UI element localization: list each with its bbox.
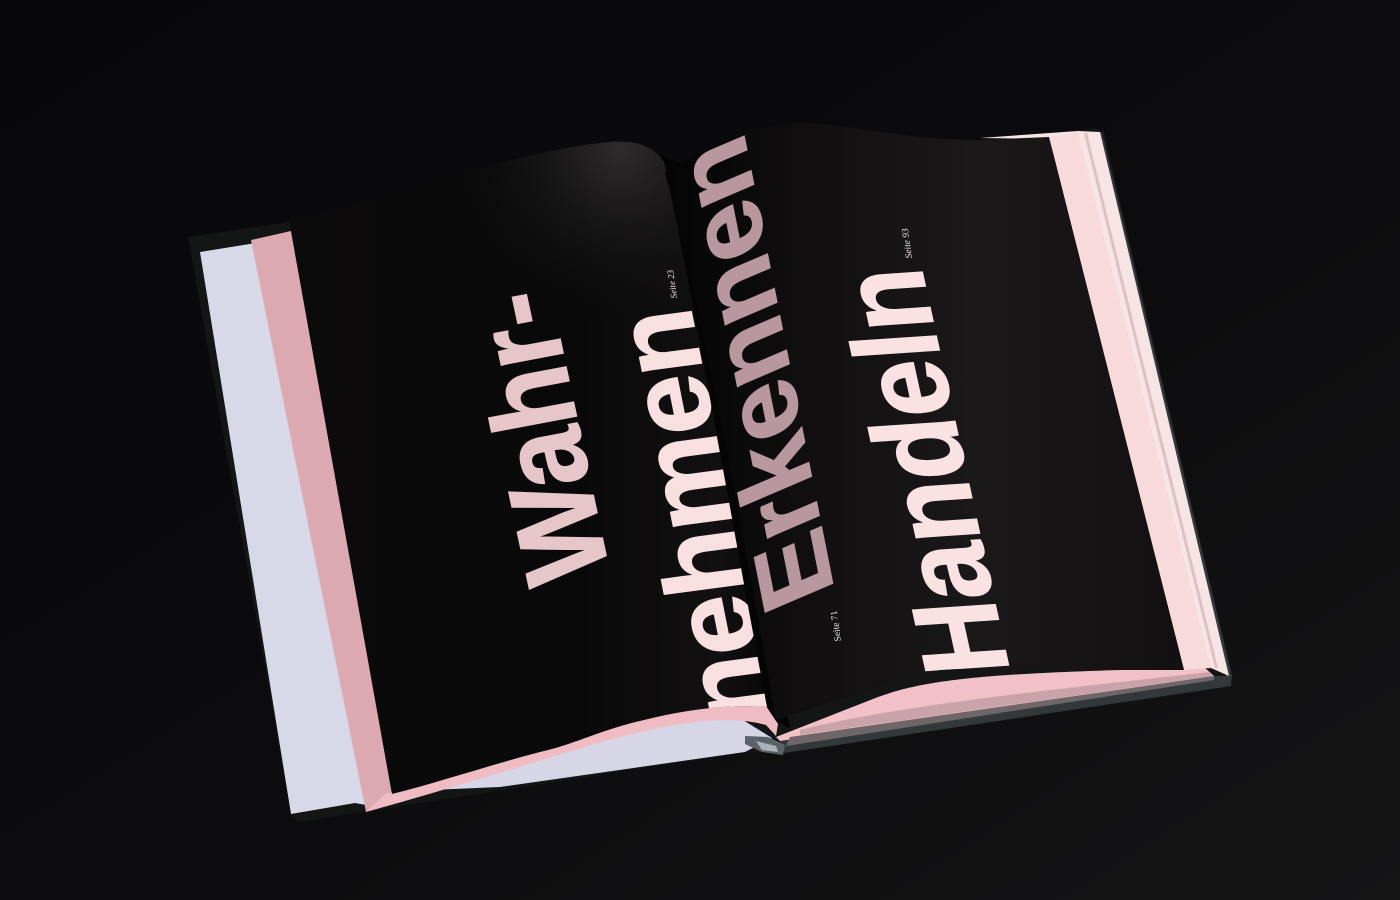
page label: Seite 23: Seite 23 bbox=[665, 269, 679, 299]
left pink lower band bbox=[366, 706, 778, 812]
book bbox=[188, 128, 1232, 822]
left white sheet bbox=[200, 242, 366, 814]
left page bbox=[290, 142, 767, 794]
right pink strip bbox=[1049, 133, 1211, 670]
word: Handeln: Handeln bbox=[813, 264, 1035, 679]
word: nehmen: nehmen bbox=[588, 302, 796, 730]
word: Erkennen: Erkennen bbox=[655, 121, 856, 628]
word: Wahr-: Wahr- bbox=[443, 281, 635, 594]
spine bbox=[745, 736, 785, 755]
left white lower block bbox=[430, 712, 772, 790]
left pink sheet bbox=[251, 231, 392, 812]
page label: Seite 71: Seite 71 bbox=[830, 610, 844, 642]
gutter shadow bbox=[650, 150, 790, 728]
right page stack edges bbox=[980, 131, 1229, 676]
hardcover bbox=[188, 128, 1232, 822]
right page bbox=[655, 115, 1200, 735]
page label: Seite 93: Seite 93 bbox=[901, 227, 915, 259]
